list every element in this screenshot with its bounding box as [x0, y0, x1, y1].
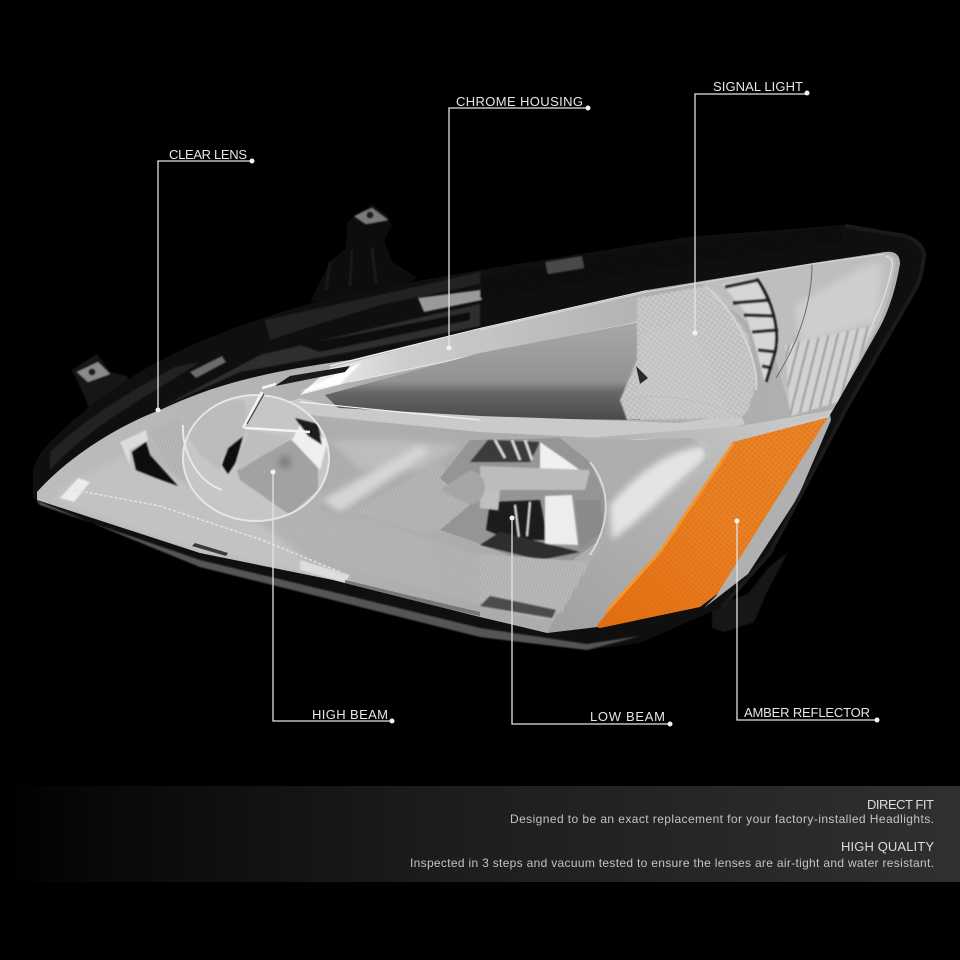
callout: signal light	[692, 79, 810, 336]
silver fender	[547, 410, 833, 633]
callout: chrome housing: CHROME HOUSING	[456, 94, 583, 109]
housing reflections	[36, 228, 840, 650]
chrome sliver beside amber	[704, 414, 831, 608]
chrome interior	[50, 254, 896, 633]
thin lens seam	[776, 264, 812, 378]
panel background	[0, 786, 960, 882]
black crescent gap	[132, 442, 178, 486]
dark reflector fins	[722, 278, 778, 384]
heading: high quality: HIGH QUALITY	[841, 839, 934, 854]
callout: high beam: HIGH BEAM	[312, 707, 388, 722]
callout: chrome housing	[446, 94, 590, 350]
high beam chrome arms	[243, 384, 310, 432]
low beam bowl	[440, 438, 607, 562]
callout: clear lens: CLEAR LENS	[169, 147, 247, 162]
callout: low beam: LOW BEAM	[590, 709, 665, 724]
text: direct fit description: Designed to be an exact replacement for your factory-installed Headlights.	[510, 812, 934, 826]
callout: amber reflector	[734, 518, 880, 722]
callout: signal light: SIGNAL LIGHT	[713, 79, 803, 94]
low beam reflector blotches	[440, 440, 604, 560]
left lens shading	[76, 458, 328, 579]
high beam interior	[183, 400, 328, 515]
lower right mounting bracket	[712, 552, 788, 632]
callout: amber reflector: AMBER REFLECTOR	[744, 705, 870, 720]
corner clear lens	[700, 254, 896, 416]
panel: feature notes	[0, 786, 960, 882]
callout: low beam	[510, 516, 672, 726]
text: high quality description: Inspected in 3 steps and vacuum tested to ensure the lenses are air-tight and water resistant.	[410, 856, 934, 870]
lower left ribbing	[195, 476, 295, 518]
corner ribbed panel	[785, 325, 875, 416]
icon: headlight assembly	[33, 204, 924, 650]
callout: clear lens	[156, 147, 254, 412]
lower chrome strip	[277, 398, 745, 440]
top chrome band	[300, 290, 647, 395]
black outer rim	[722, 226, 924, 607]
callout: high beam	[270, 470, 394, 724]
heading: direct fit: DIRECT FIT	[867, 797, 934, 812]
amber reflector	[597, 418, 830, 628]
chrome body	[37, 252, 900, 633]
top mounting bracket	[310, 204, 418, 302]
recessed shadow panel	[325, 322, 640, 420]
dark outer housing	[33, 225, 924, 650]
signal light lens	[620, 286, 757, 420]
ribbed left reflector	[150, 420, 188, 484]
lower right lens ribbing	[480, 554, 590, 620]
lower lens band	[450, 554, 470, 601]
middle lens field	[300, 418, 480, 525]
left mounting bracket	[72, 354, 130, 410]
high beam bowl	[183, 395, 329, 521]
